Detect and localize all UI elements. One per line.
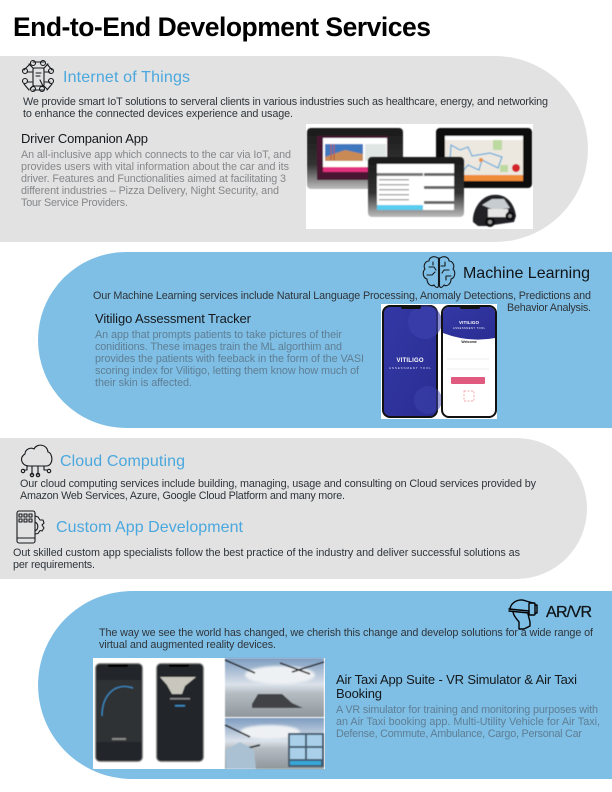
text: Air Taxi description: [336, 704, 600, 740]
VR scene: booking panel: [225, 718, 324, 769]
text: Cloud Computing description: Amazon Web Services, Azure, Google Cloud Platform and many more.: [20, 490, 345, 502]
heading: Custom App Development: Custom App Development: [56, 519, 244, 536]
icon: VR headset: [509, 600, 537, 629]
tablet: trip details screen: [368, 157, 464, 217]
icon: cloud network: [21, 445, 52, 477]
phone: splash screen: VITILIGO: [396, 358, 424, 364]
text: IoT intro: We provide smart IoT solutions to serveral clients in various industries such as healthcare, energy, and networking: [23, 96, 548, 108]
icon: IoT phone network: [22, 60, 54, 92]
text: Vitiligo description: coniditions. These images train the ML algorthim and: [95, 341, 342, 353]
subheading: Vitiligo Assessment Tracker: Vitiligo Assessment Tracker: [95, 311, 252, 326]
text: Air Taxi description: A VR simulator for training and monitoring purposes with: [336, 704, 598, 716]
phone: login screen: [441, 305, 497, 418]
car: [473, 195, 516, 227]
subheading: Air Taxi App Suite: [336, 672, 577, 701]
icon: phone with gear: [17, 511, 44, 543]
panel: Machine Learning: [38, 252, 612, 428]
text: Driver Companion App description: different industries – Pizza Delivery, Night Security, and: [21, 185, 279, 197]
text: Air Taxi description: an Air Taxi booking app. Multi-Utility Vehicle for Air Taxi,: [336, 716, 600, 728]
text: Driver Companion App description: provides users with vital information about the car and its: [21, 161, 290, 173]
text: Driver Companion App description: driver. Features and Functionalities aimed at facilitating 3: [21, 173, 286, 185]
icon: brain: [423, 257, 455, 287]
subheading: Air Taxi App Suite: Booking: [336, 686, 382, 701]
text: Driver Companion App description: An all-inclusive app which connects to the car via IoT, and: [21, 149, 291, 161]
heading: AR/VR: AR/VR: [546, 604, 592, 621]
text: IoT intro: to enhance the connected devices experience and usage.: [23, 108, 293, 120]
text: Vitiligo description: scoring index for Vilitigo, letting them know how much of: [95, 365, 360, 377]
tablet: map screen: [436, 128, 532, 188]
image: Vitiligo app phones: [381, 304, 497, 419]
image: air taxi app and VR simulator: [93, 658, 325, 769]
subheading: Driver Companion App: Driver Companion App: [21, 131, 148, 146]
text: Vitiligo description: provides the patients with feeback in the form of the VASI: [95, 353, 364, 365]
VR scene: aircraft on rooftop: [225, 658, 324, 717]
text: Machine Learning intro: Behavior Analysis.: [507, 302, 591, 314]
subheading: Air Taxi App Suite: Air Taxi App Suite - VR Simulator & Air Taxi: [336, 672, 577, 687]
text: AR/VR intro: The way we see the world has changed, we cherish this change and develop solutions for a wide range of: [99, 627, 594, 639]
phone: splash screen: [382, 305, 442, 418]
text: Driver Companion App description: [21, 149, 291, 209]
phone: flight route: [95, 663, 143, 762]
phone: air taxi: [156, 663, 204, 762]
text: AR/VR intro: virtual and augmented reality devices.: [99, 639, 276, 651]
text: Vitiligo description: [95, 329, 364, 389]
text: Custom App description: Out skilled custom app specialists follow the best practice of the industry and deliver successful solutions as: [13, 547, 521, 559]
text: Cloud Computing description: [20, 478, 537, 502]
text: Driver Companion App description: Tour Service Providers.: [21, 197, 128, 209]
phone: login screen: Welcome: [461, 340, 477, 344]
text: Custom App description: per requirements.: [13, 559, 95, 571]
text: Cloud Computing description: Our cloud computing services include building, managing, usage and consulting on Cloud services provided by: [20, 478, 537, 490]
heading: Internet of Things: Internet of Things: [63, 69, 190, 86]
phone: login screen: VITILIGO: [459, 320, 479, 325]
text: Custom App description: [13, 547, 521, 571]
text: Machine Learning intro: [93, 290, 591, 314]
phone: splash screen: ASSESSMENT TOOL: [389, 366, 431, 370]
text: Machine Learning intro: Our Machine Learning services include Natural Language Processing, Anomaly Detections, Predictions and: [93, 290, 591, 302]
phone: login screen: ASSESSMENT TOOL: [453, 327, 486, 330]
text: Vitiligo description: An app that prompts patients to take pictures of their: [95, 329, 342, 341]
panel: Cloud Computing and Custom App Development: [0, 438, 587, 579]
image: tablets and electric car: [306, 124, 533, 229]
heading: Machine Learning: Machine Learning: [463, 265, 590, 282]
heading: Cloud Computing: Cloud Computing: [60, 453, 185, 470]
panel: AR/VR: [38, 591, 612, 779]
text: IoT intro: [23, 96, 548, 120]
title: End-to-End Development Services: [13, 12, 431, 42]
text: AR/VR intro: [99, 627, 594, 651]
panel: Internet of Things: [0, 56, 588, 242]
tablet: trip screen: [307, 128, 403, 189]
text: Vitiligo description: their skin is affected.: [95, 377, 192, 389]
text: Air Taxi description: Defense, Commute, Ambulance, Cargo, Personal Car: [336, 728, 582, 740]
